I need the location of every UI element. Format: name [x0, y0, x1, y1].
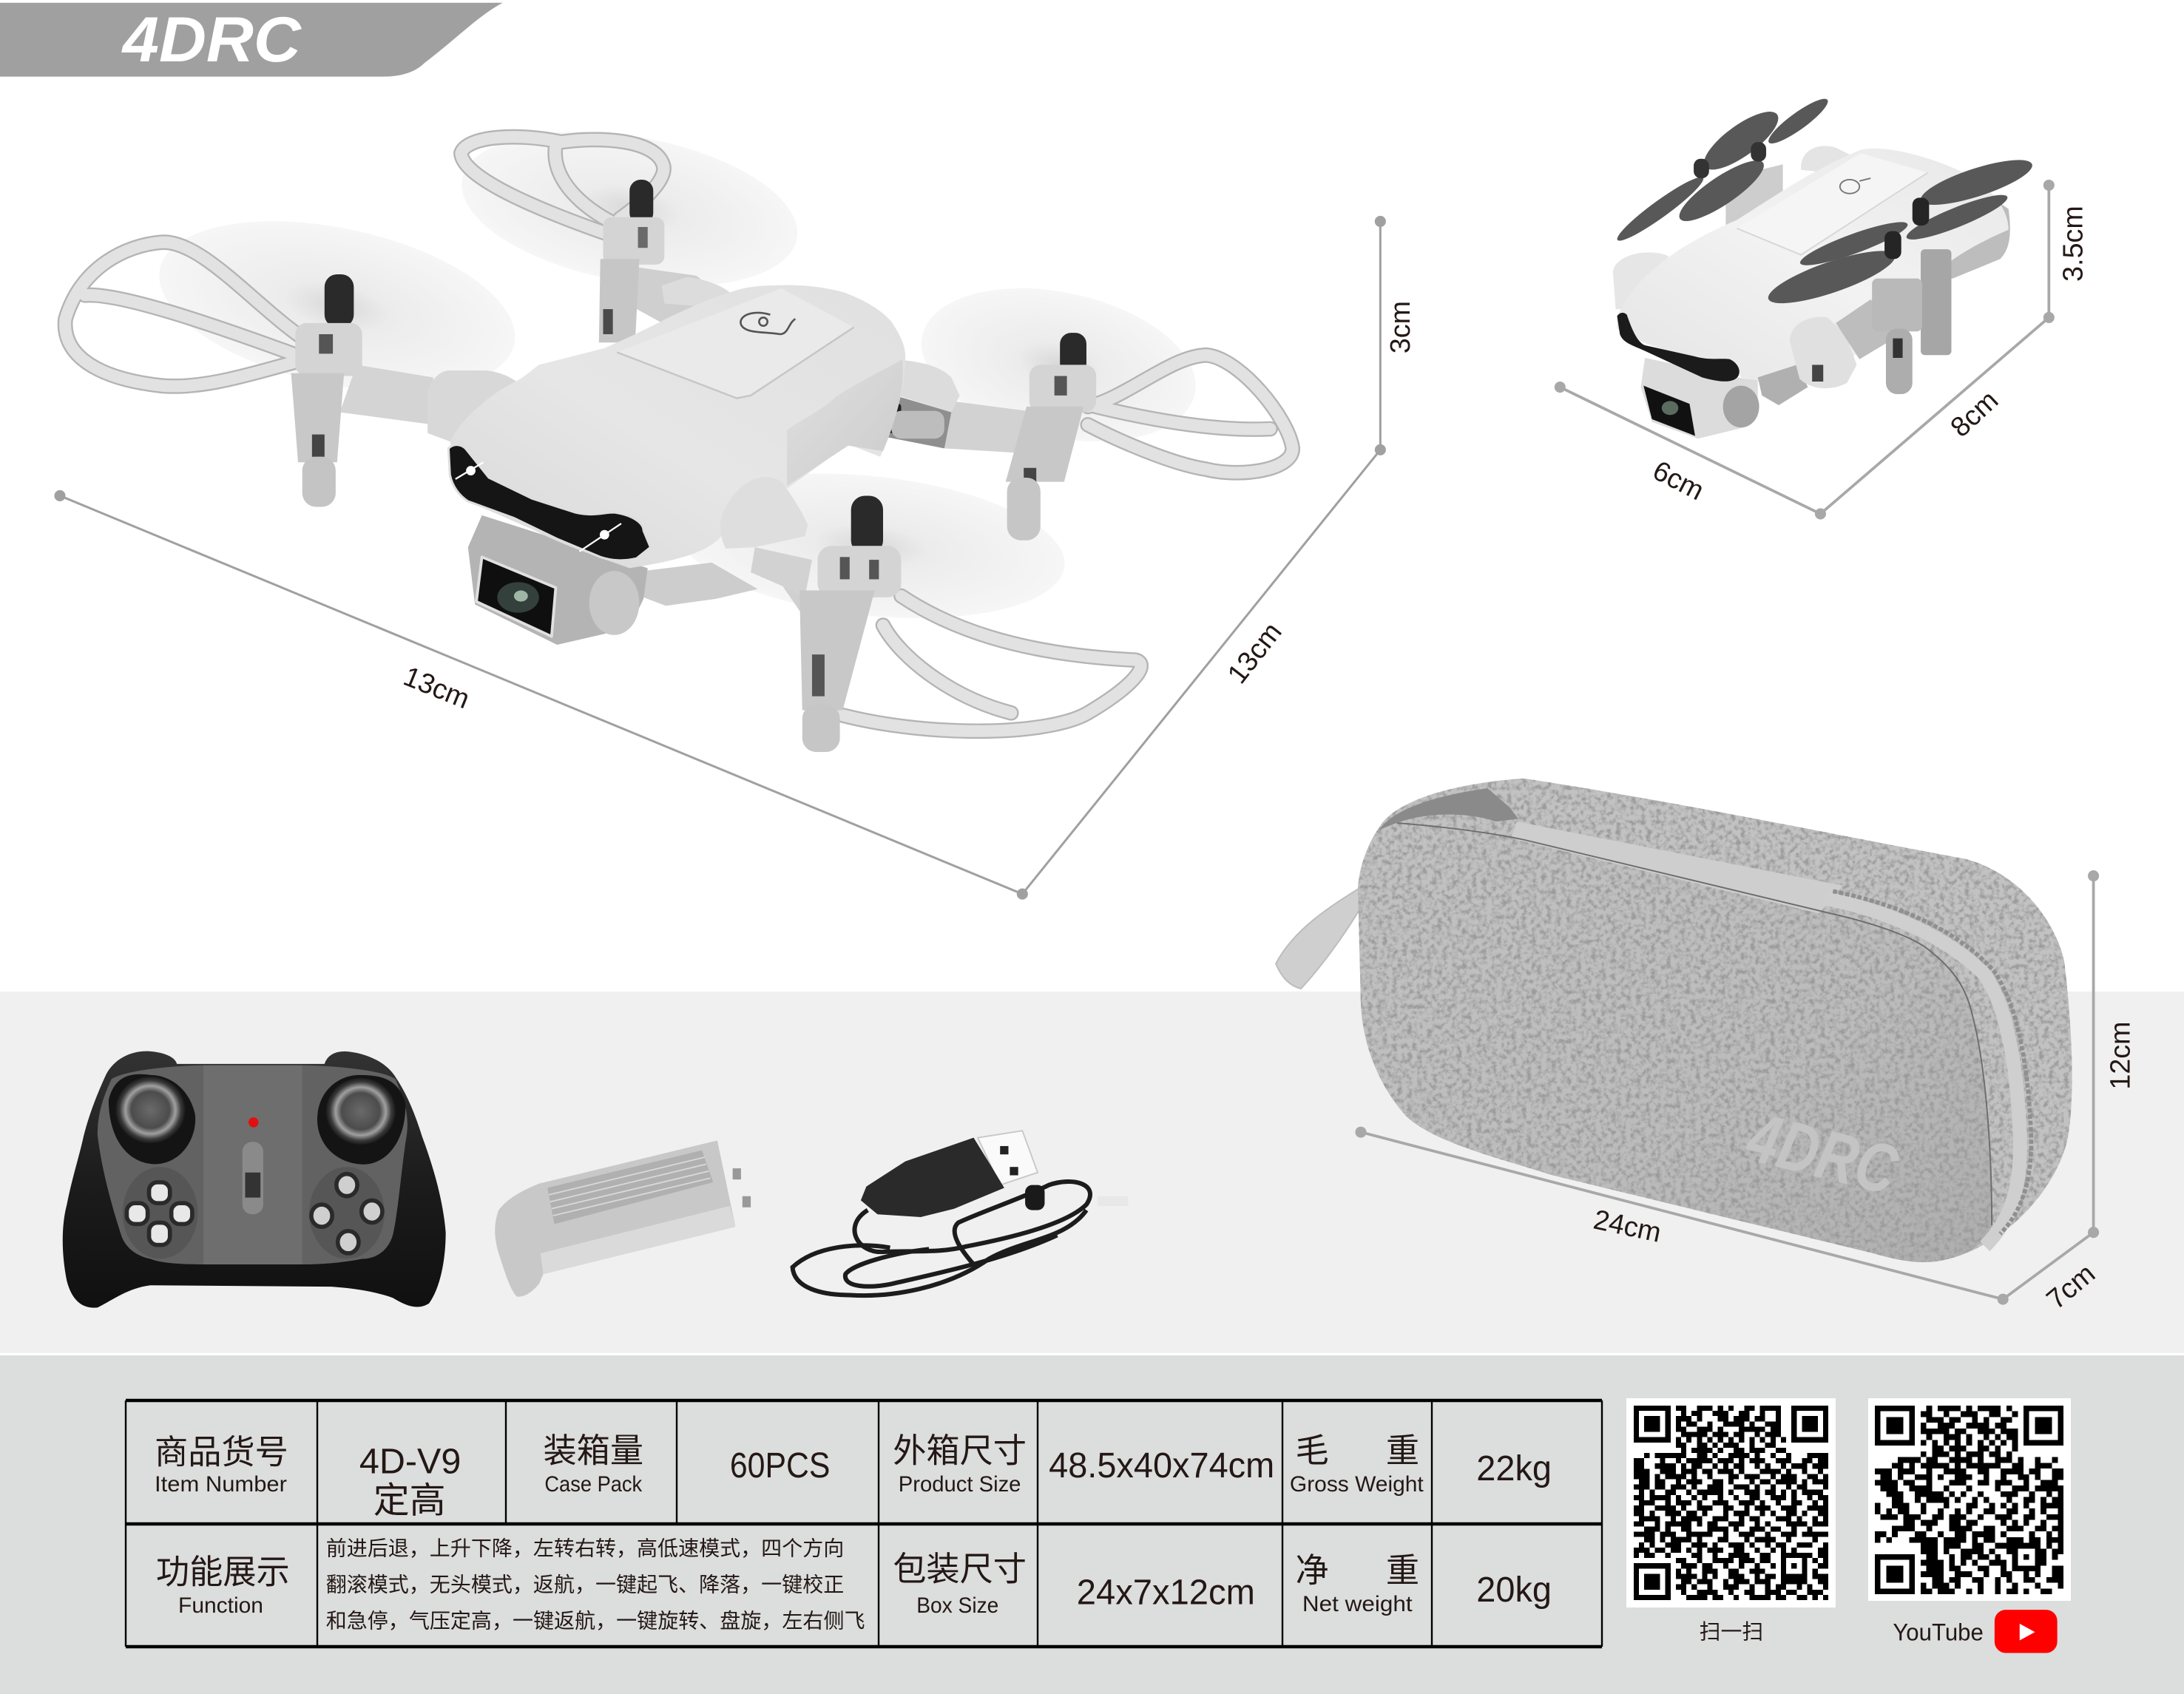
case front face: [1358, 824, 1992, 1262]
USB plug metal: [978, 1131, 1038, 1185]
rotor blur discs: [143, 108, 1210, 635]
function buttons: [309, 1167, 385, 1258]
controller face plate: [98, 1065, 408, 1264]
case dimension lines: 7cm: [2041, 1258, 2100, 1315]
case logo: 4DRC: [1740, 1097, 1906, 1210]
net weight label: Net weight: [1302, 1593, 1413, 1616]
folded body: [1617, 149, 2009, 387]
folded drone: [1612, 93, 2036, 438]
main drone dimension lines: 13cm: [1221, 617, 1288, 689]
background: specification band: [0, 1355, 2184, 1694]
gross weight value: 22kg: [1476, 1449, 1552, 1488]
folded LED strip: [1617, 313, 1740, 382]
underside block: [643, 563, 758, 606]
USB charging cable: [793, 1131, 1128, 1295]
function description: [326, 1537, 865, 1633]
header tab shape: [0, 3, 503, 77]
background: light accessories band: [0, 992, 2184, 1353]
item number label: Item Number: [155, 1473, 287, 1497]
logo wordmark: 4DRC: [121, 4, 302, 75]
left LED glint: [456, 462, 484, 479]
camera housing: [468, 515, 648, 645]
carrying case: [1276, 779, 2072, 1262]
gross weight label: 毛: [1295, 1432, 1329, 1469]
micro plug: [1098, 1196, 1128, 1206]
folded rear joint: [1801, 146, 1853, 173]
main drone, unfolded: [65, 108, 1293, 752]
scan caption: 扫一扫: [1700, 1620, 1763, 1644]
folded front joint: [1790, 299, 1901, 388]
function description: 翻滚模式，无头模式，返航，一键起飞、降落，一键校正: [326, 1573, 844, 1596]
item number value: 4D-V9: [359, 1443, 461, 1482]
gross weight label: Gross Weight: [1290, 1473, 1424, 1497]
box size label: [893, 1551, 1027, 1618]
folded drone dimension lines: 3.5cm: [2058, 206, 2089, 282]
folded rear motors: [1725, 164, 1783, 251]
box size label: Box Size: [916, 1594, 998, 1618]
cable loops: [793, 1182, 1090, 1295]
battery shell: [495, 1140, 735, 1297]
left arm and motor: [291, 274, 518, 507]
wrist strap: [1276, 883, 1367, 989]
main drone dimension lines: [54, 216, 1416, 900]
remote controller: [63, 1051, 446, 1308]
gross weight label: 重: [1386, 1432, 1419, 1469]
power switch: [243, 1142, 263, 1214]
main drone dimension lines: 13cm: [399, 660, 474, 714]
case dimension lines: 12cm: [2105, 1021, 2136, 1090]
QR code: scan: [1626, 1398, 1836, 1607]
top hatch panel: [617, 288, 853, 399]
table grid: [126, 1400, 1602, 1647]
box size label: 包装尺寸: [893, 1551, 1027, 1588]
YouTube caption: YouTube: [1893, 1619, 1984, 1646]
power LED: [249, 1117, 259, 1128]
folded drone dimension lines: 6cm: [1648, 455, 1709, 506]
front motor and arm: [720, 477, 901, 752]
net weight label: 净: [1295, 1551, 1329, 1589]
left stick well: [109, 1074, 195, 1164]
folded drone dimension lines: 8cm: [1944, 384, 2004, 443]
right arm and motor: [862, 333, 1096, 541]
direction pad: [123, 1167, 197, 1258]
battery lower edge: [541, 1206, 735, 1274]
centre panel: [203, 1065, 302, 1264]
folded side joint: [1613, 252, 1669, 309]
folded drone dimension lines: [1555, 180, 2089, 519]
zipper along curved edge: [1397, 823, 2031, 1247]
controller shell: [63, 1051, 446, 1308]
battery contacts: [733, 1168, 751, 1207]
strain relief: [1025, 1185, 1044, 1210]
left stick: [115, 1077, 185, 1143]
icon: YouTube play button: [1995, 1610, 2058, 1653]
main drone dimension lines: 3cm: [1385, 301, 1416, 353]
case pack label: [543, 1432, 643, 1497]
item number label: 商品货号: [155, 1433, 288, 1471]
item number label: [155, 1433, 288, 1497]
net weight label: [1295, 1551, 1419, 1616]
QR code: YouTube: [1868, 1398, 2071, 1601]
net weight value: 20kg: [1476, 1571, 1552, 1610]
folded camera housing: [1641, 358, 1758, 438]
propeller guards: [65, 137, 1293, 731]
net weight label: 重: [1386, 1551, 1419, 1589]
folded lens: [1643, 386, 1695, 436]
right stick well: [317, 1075, 405, 1165]
case pack label: 装箱量: [543, 1432, 643, 1469]
folded front motors: [1872, 249, 1951, 394]
front LED strip: [448, 445, 650, 560]
folded rear props: [1612, 93, 1833, 247]
product size value: 48.5x40x74cm: [1049, 1446, 1274, 1485]
drone body: [450, 285, 905, 568]
body shaded side: [787, 359, 903, 486]
power icon on hatch: [740, 313, 795, 334]
specification table: [126, 1400, 1602, 1647]
product size label: [893, 1432, 1027, 1497]
folded side cylinder: [1723, 386, 1759, 427]
folded front props: [1763, 151, 2036, 314]
box size value: 24x7x12cm: [1077, 1573, 1255, 1613]
right LED glint: [579, 524, 621, 552]
function description: 前进后退，上升下降，左转右转，高低速模式，四个方向: [326, 1537, 844, 1560]
case back and top: [1358, 779, 2072, 1262]
USB connector body: [861, 1138, 1004, 1217]
spare battery: [495, 1140, 751, 1297]
item number value: 定高: [373, 1481, 446, 1520]
zipper tape: [1511, 821, 1843, 913]
folded rear arm: [1922, 203, 2010, 279]
battery vent area: [547, 1151, 713, 1224]
case pack value: 60PCS: [730, 1446, 830, 1485]
item number value: [359, 1443, 461, 1520]
case pack label: Case Pack: [544, 1473, 643, 1497]
folded power icon: [1840, 178, 1870, 194]
product size label: 外箱尺寸: [893, 1432, 1027, 1469]
function label: 功能展示: [156, 1553, 290, 1590]
function description: 和急停，气压定高，一键返航，一键旋转、盘旋，左右侧飞: [326, 1610, 865, 1633]
rear motor and arm: [599, 180, 730, 342]
product size label: Product Size: [899, 1473, 1021, 1497]
right stick: [326, 1078, 396, 1145]
case dimension lines: 24cm: [1591, 1204, 1664, 1248]
gross weight label: [1290, 1432, 1424, 1497]
function label: [156, 1553, 290, 1618]
case dimension lines: [1355, 870, 2136, 1315]
header logo tab: [0, 3, 503, 77]
zipper pull: [1379, 788, 1518, 830]
folded lower body: [1758, 365, 1808, 405]
function label: Function: [178, 1594, 263, 1618]
folded top panel: [1737, 153, 1927, 255]
